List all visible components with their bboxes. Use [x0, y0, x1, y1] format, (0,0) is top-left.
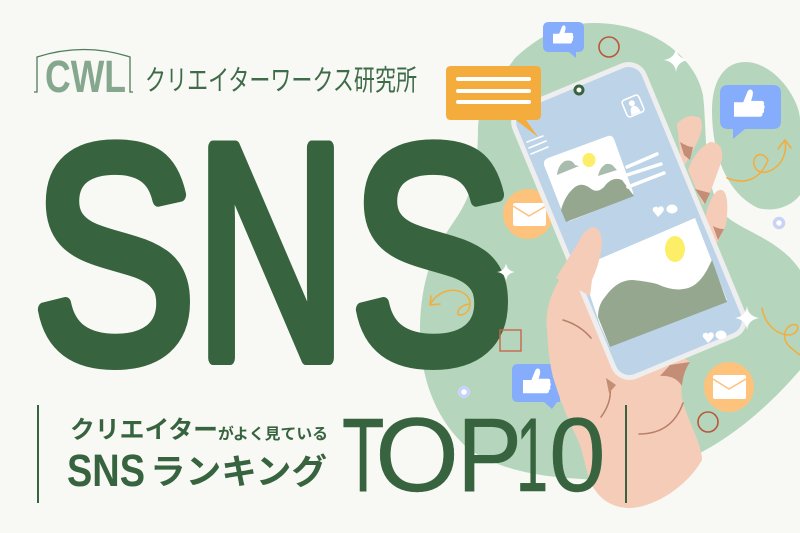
finger 2 shadow	[695, 189, 710, 204]
icon: red ring lower	[698, 412, 718, 432]
subtitle SNS: SNS	[67, 445, 145, 496]
large post card	[590, 218, 727, 347]
TOP10: P	[457, 397, 522, 514]
icon: small like bubble top	[543, 22, 584, 58]
icon: like bubble lower	[512, 364, 560, 409]
big title SNS	[32, 82, 514, 425]
icon: lilac dot left	[460, 388, 468, 396]
big title SNS: S	[350, 83, 514, 425]
TOP10: T	[342, 395, 384, 513]
arrow: right curly orange	[727, 140, 791, 181]
icon: red square	[500, 330, 521, 351]
clouds	[557, 160, 579, 175]
finger 3	[700, 190, 727, 245]
phone	[508, 59, 750, 383]
finger 3 shadow	[713, 226, 724, 240]
hand: palm and fingers	[547, 116, 727, 508]
logo	[34, 50, 133, 102]
icon: mail lower	[704, 362, 754, 412]
icon: sparkle phone corner	[735, 306, 759, 330]
icon: red ring top	[599, 37, 619, 57]
TOP10: O	[375, 396, 459, 514]
sparkle left	[497, 263, 515, 281]
background blob: large green	[420, 23, 800, 480]
big title SNS: S	[32, 83, 196, 425]
phone menu lines	[527, 136, 548, 154]
big title SNS: N	[196, 82, 346, 423]
heart and comment icons 2	[703, 330, 726, 343]
TOP10	[342, 395, 606, 514]
palm shadow under phone	[660, 362, 690, 386]
TOP10: 0	[549, 396, 606, 513]
speech bubble orange	[446, 66, 541, 137]
logo wordmark: クリエイターワークス研究所	[145, 65, 417, 97]
phone camera	[575, 86, 583, 94]
post text lines	[627, 154, 664, 187]
arrow: left curly orange	[430, 290, 470, 315]
mountains	[561, 179, 634, 222]
icon: sparkle top	[664, 48, 688, 72]
mountain	[598, 260, 727, 347]
background blob: right green	[712, 62, 800, 209]
subtitle	[67, 416, 328, 496]
TOP10: 1	[516, 396, 548, 513]
subtitle ranking: ランキング	[150, 453, 327, 492]
finger 2	[688, 142, 722, 205]
palm fold	[606, 378, 616, 393]
icon: mail left	[503, 189, 553, 239]
sun	[665, 236, 685, 262]
hand crease lines	[563, 320, 683, 434]
logo letters CWL: CWL	[45, 51, 126, 102]
thumb	[556, 227, 602, 296]
divider left	[37, 405, 39, 503]
icon: big like bubble	[720, 85, 781, 139]
subtitle line 1: クリエイター	[70, 416, 218, 444]
finger 1 shadow	[680, 142, 693, 160]
subtitle small: がよく見ている	[218, 424, 328, 443]
phone body	[508, 59, 750, 383]
post card image	[544, 136, 634, 222]
divider right	[625, 405, 627, 503]
heart and comment icons 1	[653, 204, 678, 217]
phone profile icon	[621, 94, 645, 118]
icon: lilac dot right	[774, 218, 784, 228]
sun	[582, 153, 596, 167]
arrow: bottom-right curly orange	[762, 308, 800, 355]
finger 1	[677, 116, 702, 170]
logo arch	[34, 50, 133, 92]
palm	[547, 258, 702, 508]
